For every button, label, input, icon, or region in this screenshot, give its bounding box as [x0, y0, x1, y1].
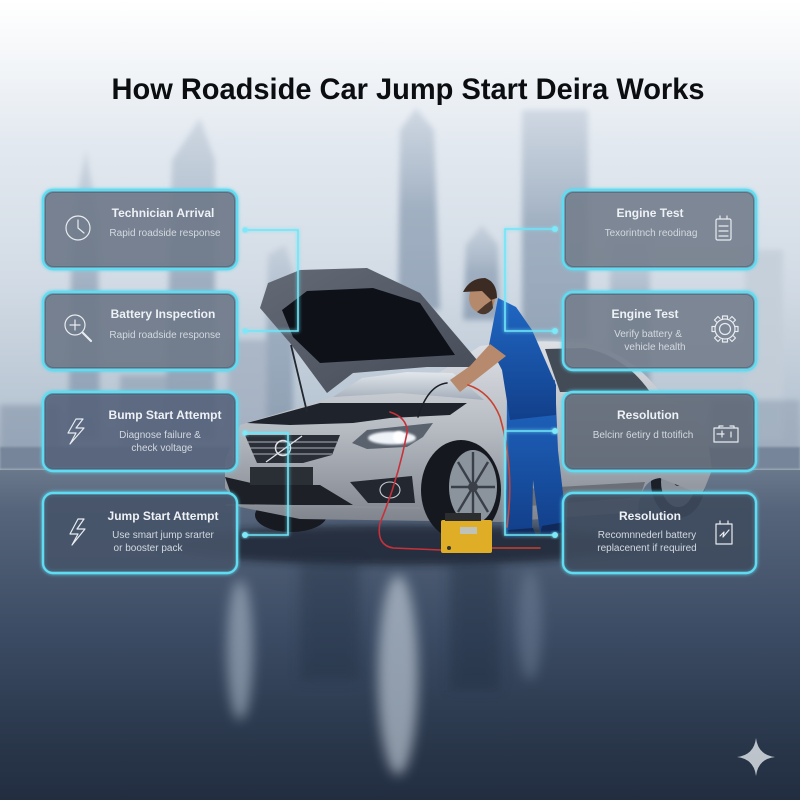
panel: Jump Start Attempt	[43, 493, 237, 573]
shoes	[506, 522, 568, 538]
icon: sparkle watermark	[737, 738, 775, 776]
description: Diagnose failure &	[119, 430, 201, 441]
background: wet road	[0, 447, 800, 800]
rear wheel	[651, 446, 705, 518]
icon: lightning bolt	[68, 419, 84, 444]
car body	[225, 341, 712, 522]
connector: right upper	[505, 226, 558, 334]
heading: Engine Test	[616, 206, 684, 220]
description: check voltage	[131, 443, 193, 454]
heading: Bump Start Attempt	[109, 408, 221, 422]
icon: magnifier	[65, 315, 91, 341]
description: vehicle health	[624, 342, 686, 353]
panel: Technician Arrival	[43, 190, 237, 269]
heading: Battery Inspection	[111, 307, 215, 321]
icon: gear	[712, 316, 738, 342]
description: replacenent if required	[597, 543, 697, 554]
engine bay	[247, 403, 467, 425]
panel: Battery Inspection	[43, 292, 237, 370]
panel: Resolution (battery)	[563, 392, 756, 471]
panel: Bump Start Attempt	[43, 392, 237, 471]
grille	[245, 435, 340, 463]
description: Use smart jump srarter	[112, 530, 215, 541]
description: Verify battery &	[614, 329, 682, 340]
icon: clock	[66, 216, 90, 240]
front right wheel	[421, 440, 501, 540]
description: or booster pack	[114, 543, 183, 554]
connector: left lower	[242, 430, 288, 538]
arm	[450, 344, 506, 392]
heading: Jump Start Attempt	[108, 509, 218, 523]
description: Rapid roadside response	[109, 228, 221, 239]
icon: checklist battery	[716, 216, 731, 240]
title: How Roadside Car Jump Start Deira Works	[112, 73, 704, 106]
description: Rapid roadside response	[109, 330, 221, 341]
windshield	[333, 372, 484, 400]
booster pack	[441, 513, 492, 553]
heading: Technician Arrival	[112, 206, 214, 220]
open hood	[260, 268, 477, 412]
side windows	[545, 348, 650, 392]
car	[225, 268, 712, 540]
background: city skyline	[0, 108, 800, 453]
panel: Engine Test (reading)	[563, 190, 756, 269]
number plate and bumper intake	[225, 467, 420, 508]
connector: left upper	[242, 227, 298, 334]
description: Recomnnederl battery	[598, 530, 696, 541]
legs	[506, 380, 567, 534]
panel: Resolution (recommend)	[563, 493, 756, 573]
front left wheel	[255, 498, 327, 532]
description: Belcinr 6etiry d ttotifich	[593, 430, 693, 441]
jump cables	[379, 383, 540, 550]
panel: Engine Test (verify)	[563, 292, 756, 370]
icon: lightning bolt	[70, 519, 85, 545]
background: misty sky	[0, 0, 800, 470]
connector: right lower	[505, 428, 558, 538]
heading: Resolution	[617, 408, 679, 422]
technician	[450, 278, 568, 538]
heading: Engine Test	[611, 307, 679, 321]
torso	[489, 298, 556, 420]
icon: car battery	[714, 426, 738, 442]
head	[463, 278, 497, 314]
lower sill	[505, 482, 645, 508]
description: Texorintnch reodinag	[605, 228, 697, 239]
heading: Resolution	[619, 509, 681, 523]
icon: battery check	[716, 521, 732, 544]
headlight	[352, 423, 433, 449]
